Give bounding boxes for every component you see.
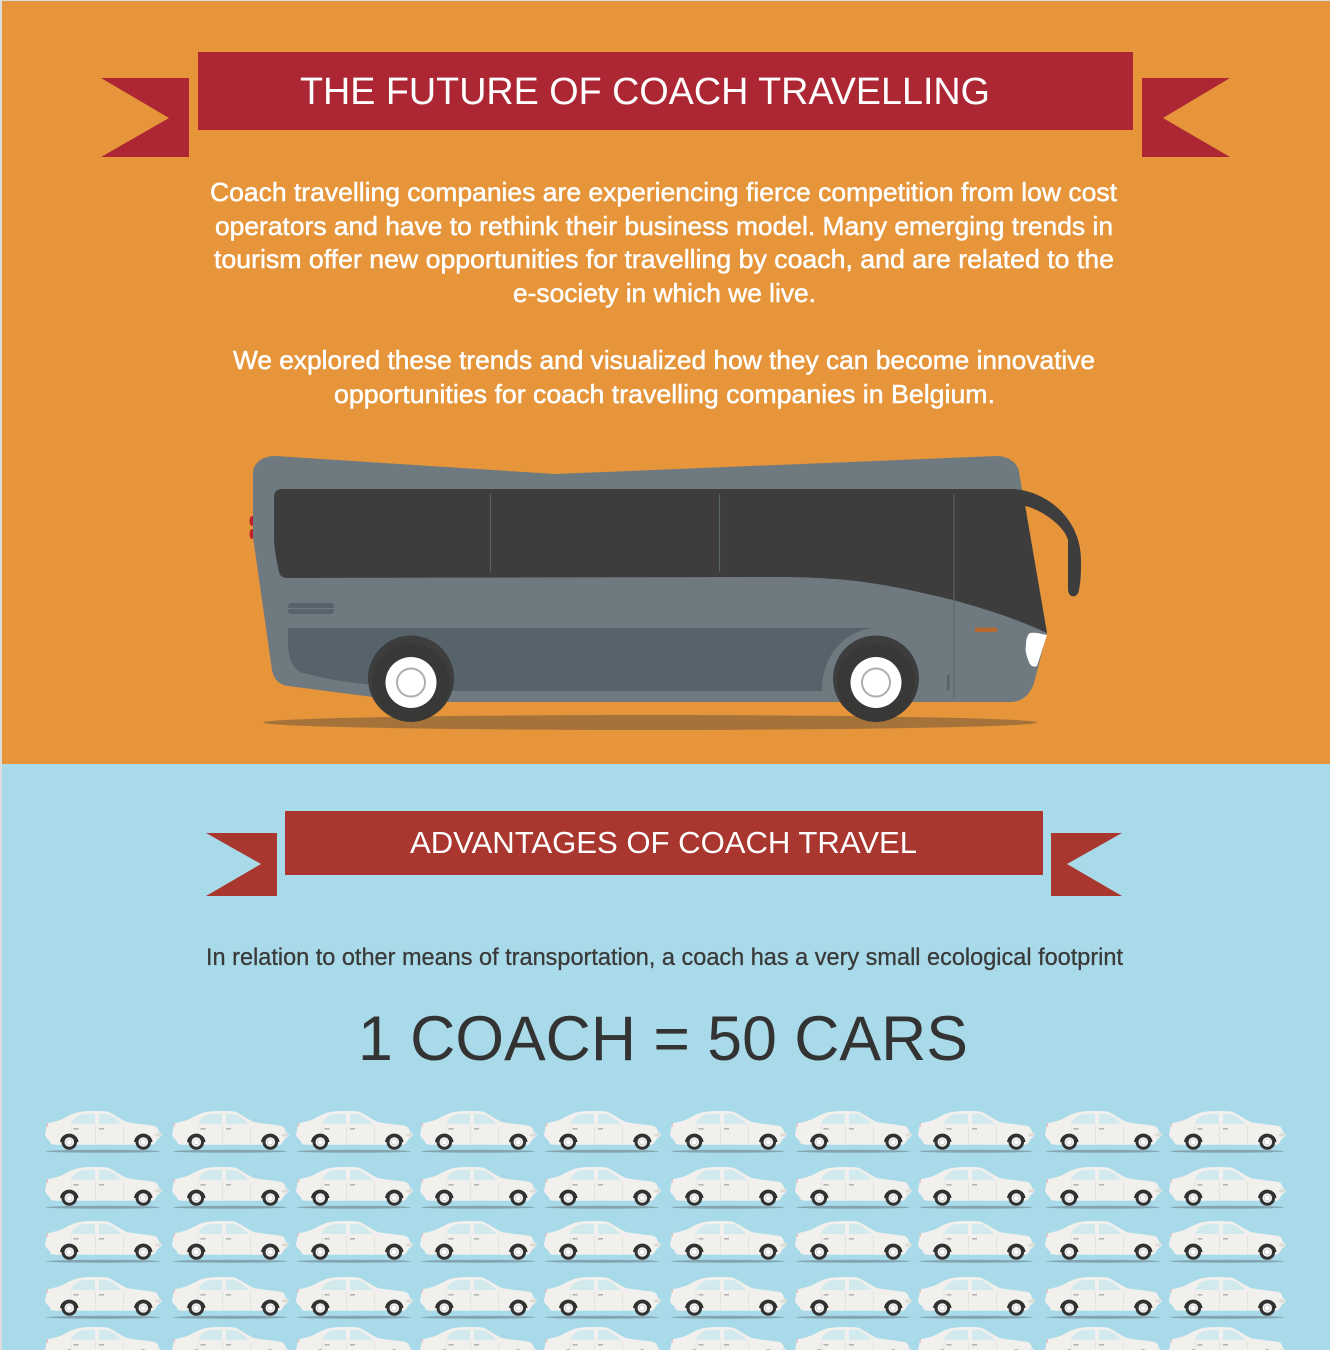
- luggage panel: [288, 628, 875, 691]
- ribbon left tail: [101, 78, 189, 157]
- tail lights: [250, 516, 254, 539]
- orange side marker: [975, 628, 997, 632]
- car row 5: [45, 1327, 1286, 1350]
- ribbon left tail: [206, 833, 277, 896]
- pictogram: grid of 50 cars: [45, 1111, 1286, 1350]
- headline stat: 1 coach = 50 cars: 1 COACH = 50 CARS: [358, 1004, 968, 1074]
- ribbon band: [198, 52, 1133, 130]
- illustration: coach: [250, 456, 1081, 730]
- intro text block: Coach travelling companies are experiencing fierce competition from low cost: [210, 177, 1118, 207]
- car row 4: [45, 1277, 1286, 1319]
- intro text block: We explored these trends and visualized how they can become innovative: [233, 345, 1095, 375]
- wing mirror: [1013, 489, 1081, 596]
- coach windows: [274, 489, 1047, 633]
- intro text block: tourism offer new opportunities for travelling by coach, and are related to the: [214, 244, 1114, 274]
- intro text block: e-society in which we live.: [513, 278, 816, 308]
- ecological footprint sentence: In relation to other means of transportation, a coach has a very small ecological footprint: [206, 944, 1123, 971]
- intro text block: [210, 177, 1118, 409]
- ribbon right tail: [1051, 833, 1122, 896]
- intro text block: operators and have to rethink their business model. Many emerging trends in: [215, 211, 1113, 241]
- headlight: [1026, 633, 1047, 667]
- car row 2: [45, 1167, 1286, 1209]
- panel: blue advantages section: [2, 764, 1330, 1350]
- window dividers and door line: [490, 494, 954, 698]
- title ribbon: [101, 52, 1230, 157]
- ribbon right tail: [1142, 78, 1230, 157]
- car row 1: [45, 1111, 1286, 1153]
- title: THE FUTURE OF COACH TRAVELLING: [300, 71, 990, 113]
- coach body: [253, 456, 1047, 702]
- ribbon band: [285, 811, 1043, 875]
- door slot: [947, 675, 950, 690]
- car row 3: [45, 1221, 1286, 1263]
- advantages ribbon: [206, 811, 1122, 896]
- front wheel: [833, 636, 919, 722]
- panel: orange header section: [2, 1, 1330, 764]
- coach ground shadow: [263, 715, 1037, 730]
- rear wheel: [368, 636, 454, 722]
- intro text block: opportunities for coach travelling companies in Belgium.: [334, 379, 995, 409]
- side vent: [288, 603, 334, 614]
- section heading: ADVANTAGES OF COACH TRAVEL: [410, 825, 917, 860]
